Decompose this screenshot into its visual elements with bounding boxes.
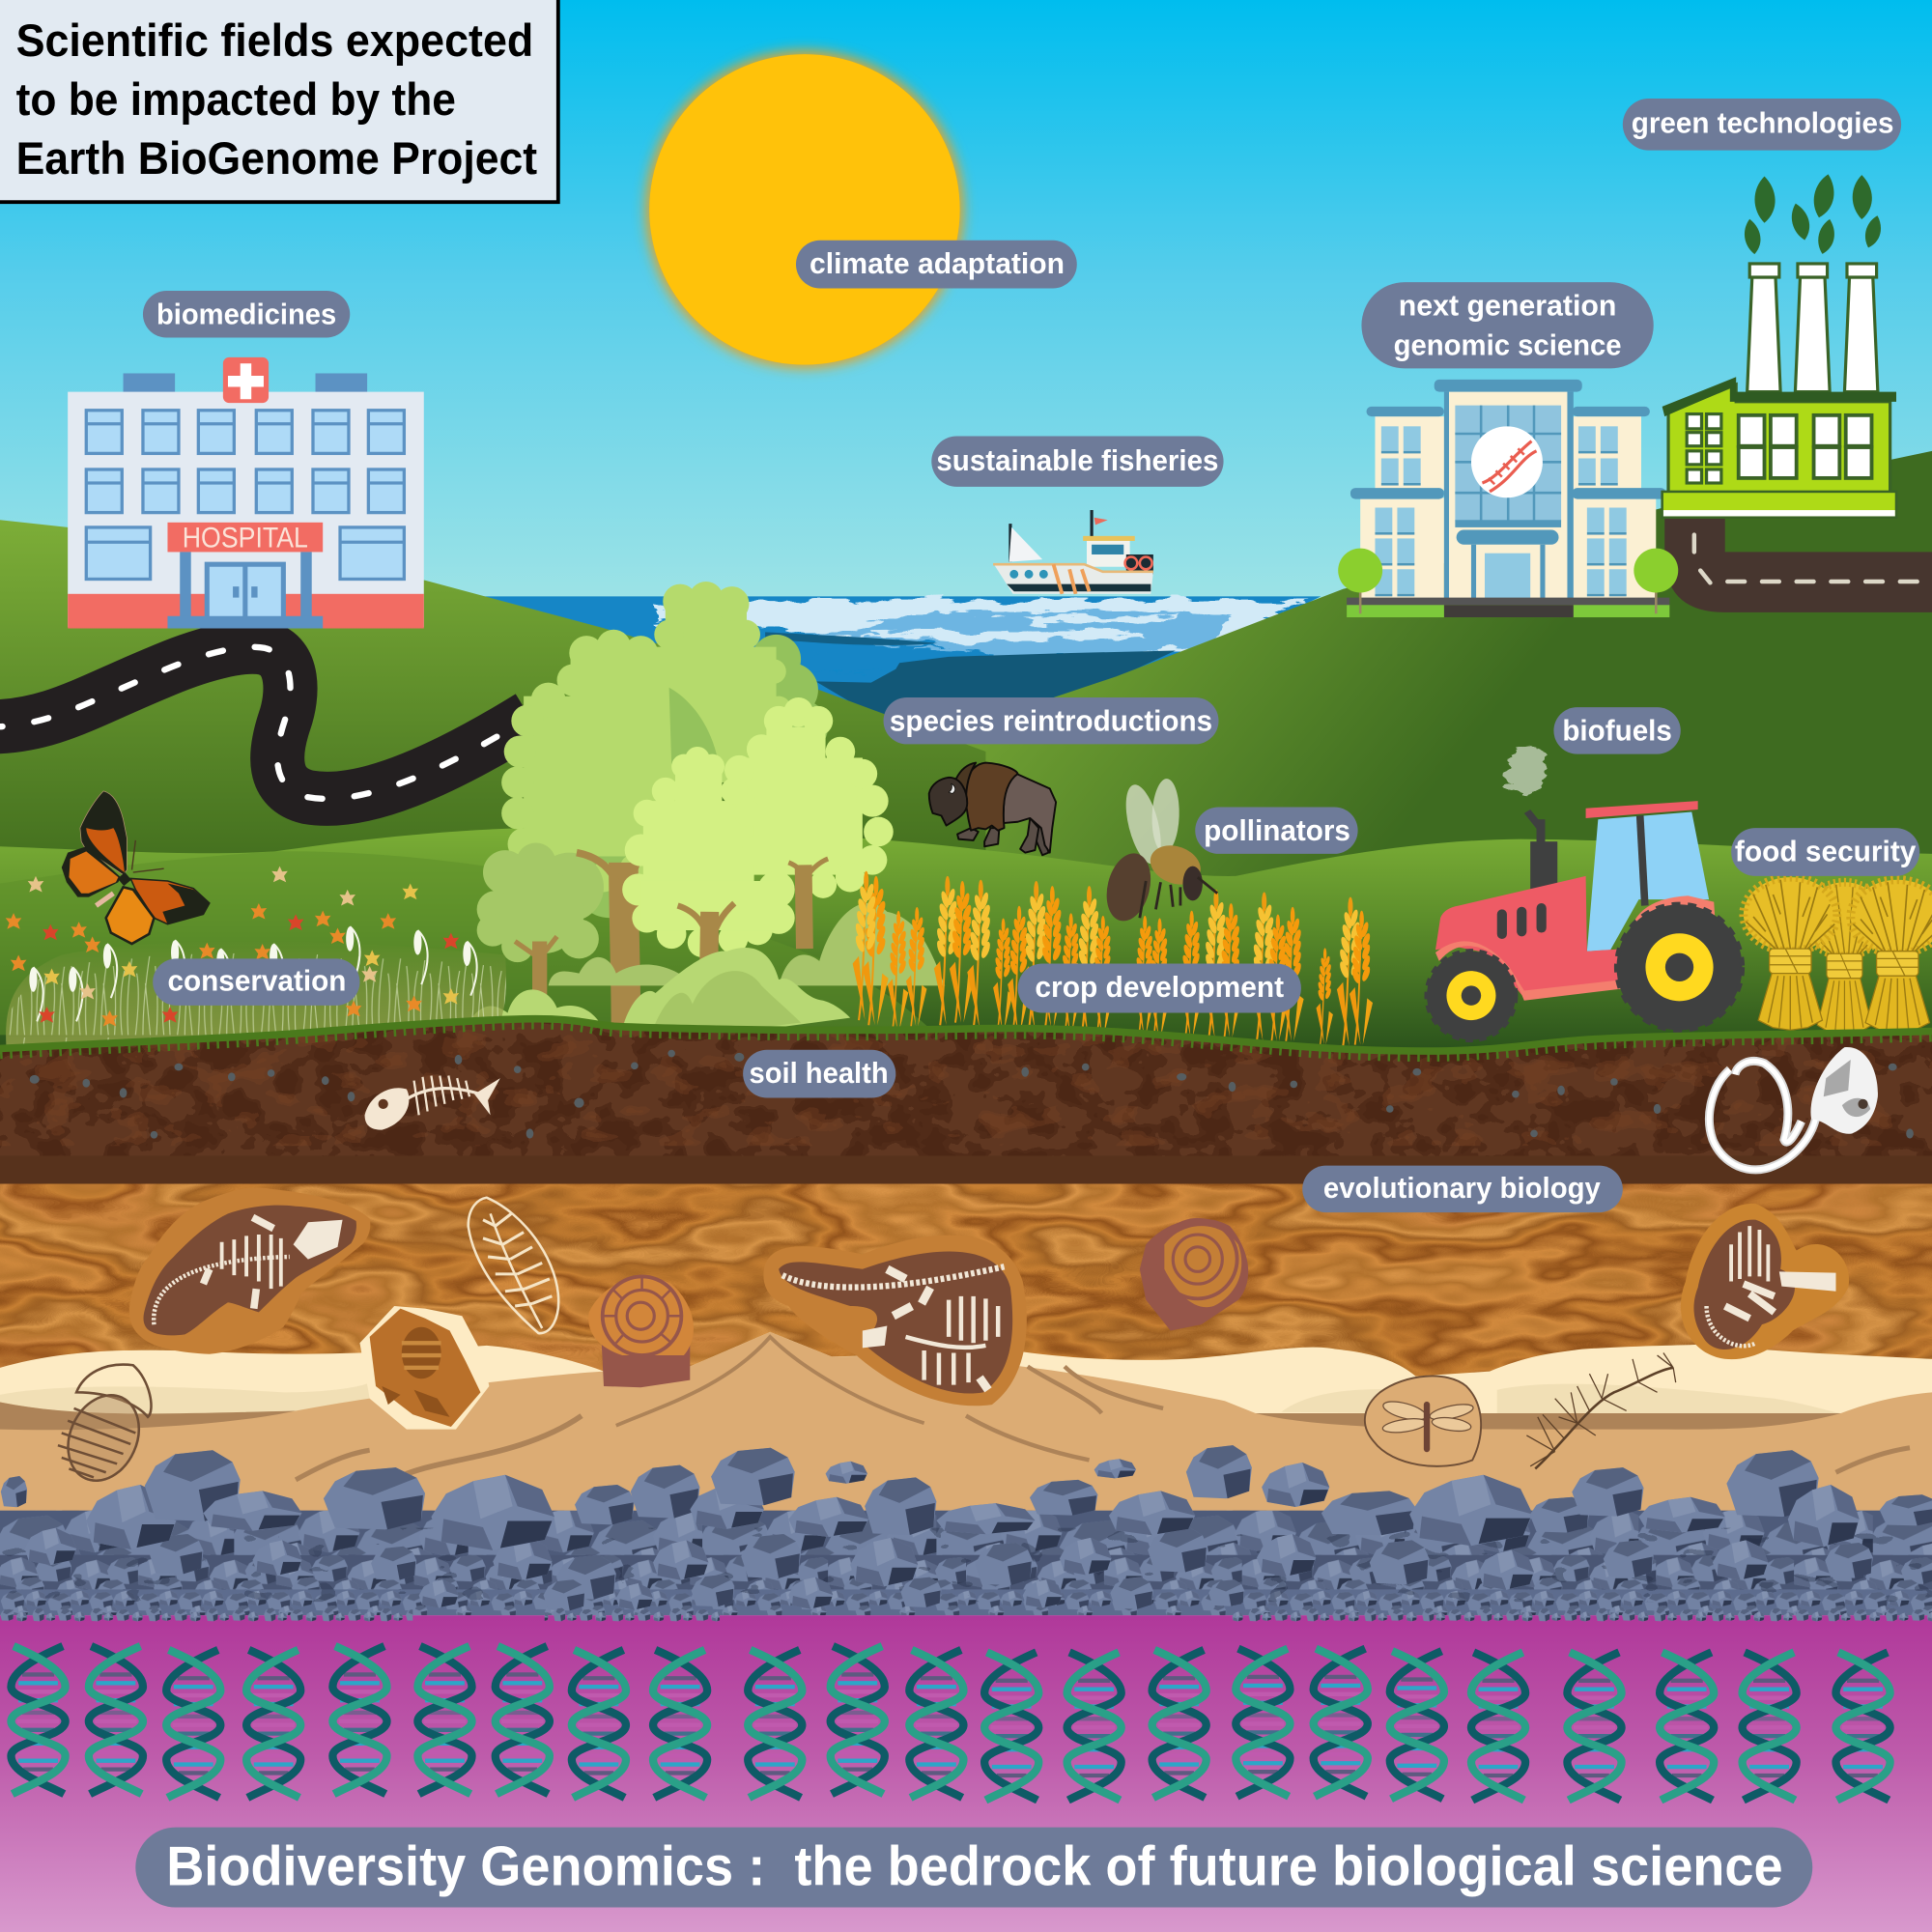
label: pollinators: pollinators xyxy=(1204,814,1350,847)
butterfly xyxy=(62,791,210,944)
exhaust xyxy=(1524,810,1557,891)
sand and cream bands xyxy=(0,1332,1932,1552)
DNA helices xyxy=(11,1646,1890,1801)
label: food security xyxy=(1731,828,1919,876)
grass strip xyxy=(0,1019,1932,1056)
label: sustainable fisheries: sustainable fisheries xyxy=(936,444,1218,477)
label: species reintroductions: species reintroductions xyxy=(890,704,1212,737)
fossil: feathered plant xyxy=(1526,1353,1676,1468)
trees xyxy=(469,582,945,1033)
label: climate adaptation xyxy=(796,241,1077,288)
right trunk xyxy=(788,859,828,949)
fish skeleton fossil xyxy=(365,1076,500,1130)
icon: medical cross xyxy=(223,357,269,403)
sea xyxy=(483,596,1321,727)
medium rocks xyxy=(25,1528,1873,1610)
front wheel xyxy=(1427,952,1516,1040)
bee xyxy=(1100,779,1217,925)
label: sustainable fisheries xyxy=(931,437,1224,487)
fossil: round stone xyxy=(359,1306,489,1430)
icon: green leaves xyxy=(1743,172,1885,256)
soil pebbles xyxy=(30,1050,1914,1139)
tower glass xyxy=(1455,406,1561,527)
label: conservation xyxy=(153,958,359,1006)
label: soil health: soil health xyxy=(750,1057,889,1090)
flowers xyxy=(6,867,459,1026)
back left hill xyxy=(0,520,985,887)
tall tree canopy xyxy=(653,582,791,782)
label: soil health xyxy=(743,1050,895,1097)
fishing boat xyxy=(993,510,1153,594)
mammoth skull fossil xyxy=(1709,1047,1878,1170)
label: biofuels xyxy=(1553,707,1681,754)
factory windows xyxy=(1687,414,1872,483)
road to factory xyxy=(1664,518,1932,612)
front hills xyxy=(0,827,1932,1060)
back tree canopy shade xyxy=(573,635,828,925)
icon: DNA logo xyxy=(1471,426,1543,497)
hospital building xyxy=(68,357,424,629)
label: evolutionary biology: evolutionary biology xyxy=(1323,1172,1601,1205)
title panel xyxy=(0,0,558,202)
sky background xyxy=(0,0,1932,616)
bison xyxy=(929,763,1056,855)
cab glass xyxy=(1587,812,1709,952)
bushes xyxy=(469,903,945,1033)
rock fringe over genome layer xyxy=(0,1608,1932,1628)
title panel: to be impacted by the xyxy=(16,74,456,126)
right tree canopy xyxy=(724,697,894,898)
large boulders xyxy=(1,1445,1932,1550)
fenders xyxy=(1435,895,1716,1001)
label: climate adaptation: climate adaptation xyxy=(810,247,1065,280)
centre-left trunk xyxy=(577,853,640,1025)
fossil: second ammonite xyxy=(1140,1219,1248,1331)
label: biofuels: biofuels xyxy=(1562,715,1672,748)
factory base xyxy=(1662,492,1896,518)
centre trunk xyxy=(678,903,734,985)
bottom banner: Biodiversity Genomics : the bedrock of future biological science xyxy=(166,1836,1783,1898)
title panel: Earth BioGenome Project xyxy=(16,133,537,185)
small left tree xyxy=(477,842,604,1020)
tractor xyxy=(1427,801,1743,1040)
soil layer xyxy=(0,1019,1932,1189)
label: evolutionary biology xyxy=(1302,1166,1623,1212)
chimneys xyxy=(1747,264,1878,392)
label: biomedicines xyxy=(143,291,350,337)
trees xyxy=(1338,549,1678,613)
label: next generation genomic science: next generation xyxy=(1399,290,1616,323)
title panel: Scientific fields expected xyxy=(16,15,533,67)
icon: exhaust smoke xyxy=(1502,742,1545,797)
building entrance xyxy=(1457,529,1559,601)
label: biomedicines: biomedicines xyxy=(156,298,336,330)
label: species reintroductions xyxy=(884,697,1218,744)
science building xyxy=(1338,380,1678,617)
body xyxy=(1435,876,1627,998)
rock layer xyxy=(0,1445,1932,1615)
hospital windows xyxy=(86,411,404,579)
label: next generation genomic science: genomic science xyxy=(1394,328,1622,361)
fossil: trilobite xyxy=(55,1365,152,1492)
label: food security: food security xyxy=(1735,836,1916,868)
fossil: first dinosaur xyxy=(129,1187,370,1354)
fossil: large dinosaur xyxy=(763,1236,1027,1406)
sun xyxy=(645,50,963,368)
genome layer xyxy=(0,1615,1932,1932)
factory xyxy=(1662,172,1896,518)
label: pollinators xyxy=(1195,807,1358,854)
fossil: sail-back dinosaur xyxy=(1681,1204,1849,1359)
hospital entrance xyxy=(167,552,323,629)
wheat sheaves xyxy=(1744,877,1932,1035)
label: green technologies xyxy=(1623,99,1901,151)
centre tree canopy xyxy=(622,747,795,957)
road to hospital xyxy=(0,647,529,799)
fossil: dragonfly xyxy=(1365,1376,1481,1466)
label: green technologies: green technologies xyxy=(1632,107,1893,140)
rear wheel xyxy=(1616,904,1743,1030)
label: crop development xyxy=(1018,963,1301,1012)
hospital sign: HOSPITAL xyxy=(183,522,308,554)
cab roof xyxy=(1586,801,1698,818)
grounds and steps xyxy=(1347,598,1669,617)
fossil: ammonite xyxy=(588,1276,694,1387)
sand cracks xyxy=(296,1337,1910,1480)
left tree canopy xyxy=(501,630,684,892)
fossil: fern leaf xyxy=(469,1198,558,1333)
building windows xyxy=(1375,426,1627,596)
label: next generation genomic science xyxy=(1361,282,1654,368)
wheat crop xyxy=(853,871,1373,1046)
meadow grasses xyxy=(6,867,506,1045)
tall tree shade inner xyxy=(669,688,721,793)
back right hill xyxy=(863,451,1932,887)
fossil rock layer xyxy=(0,1184,1932,1400)
label: conservation: conservation xyxy=(167,965,346,998)
label: crop development: crop development xyxy=(1035,971,1284,1004)
snowdrops xyxy=(29,926,477,1021)
